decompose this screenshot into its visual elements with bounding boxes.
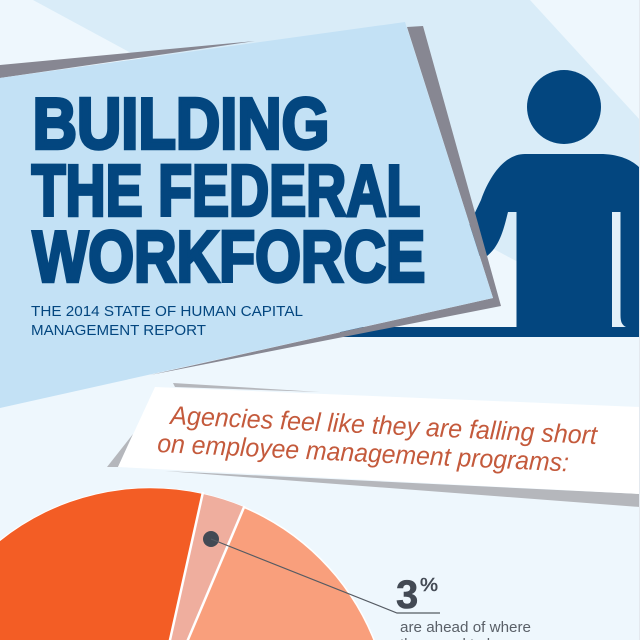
text: section heading xyxy=(157,400,599,477)
heading: title: THE FEDERAL xyxy=(32,151,420,231)
subtitle: THE 2014 STATE OF HUMAN CAPITAL xyxy=(31,303,303,320)
text: section heading: Agencies feel like they are falling short xyxy=(168,400,599,450)
panel: section heading banner xyxy=(107,383,640,507)
panel: title card xyxy=(0,22,501,408)
text: section heading: on employee management programs: xyxy=(157,428,570,477)
subtitle xyxy=(31,303,303,339)
callout: 3 percent: % xyxy=(420,575,438,595)
heading: title xyxy=(32,84,425,297)
icon: federal worker at desk xyxy=(340,70,640,337)
pie chart xyxy=(0,488,392,640)
heading: title: WORKFORCE xyxy=(33,217,425,297)
callout: 3 percent: 3 xyxy=(396,573,418,617)
subtitle: MANAGEMENT REPORT xyxy=(31,322,206,339)
callout: 3 percent: are ahead of where xyxy=(400,619,531,636)
callout: 3 percent xyxy=(203,531,531,640)
heading: title: BUILDING xyxy=(33,84,329,164)
